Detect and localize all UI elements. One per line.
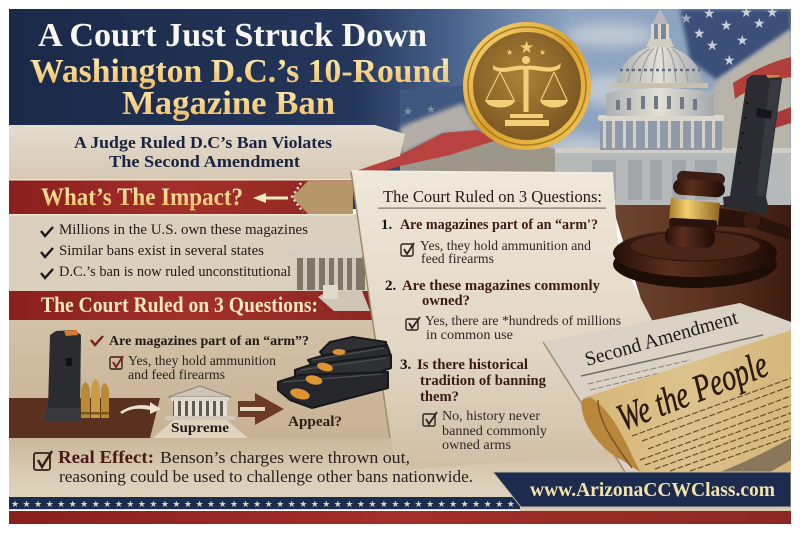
bottom red stripe	[9, 511, 791, 524]
sky and flag header background: ★	[736, 33, 749, 49]
subtitle	[74, 136, 332, 167]
sky and flag header background: ★	[426, 103, 436, 116]
bottom effect strip	[9, 438, 649, 510]
paper question 2: 2.	[385, 278, 396, 294]
tall magazine behind gavel	[723, 75, 782, 215]
gold scales medal: ★	[506, 48, 513, 57]
paper question 1	[381, 217, 598, 266]
main paper	[351, 171, 660, 470]
sky and flag header background: ★	[703, 6, 716, 22]
stars stripe	[9, 497, 520, 509]
paper heading: The Court Ruled on 3 Questions:	[383, 187, 602, 206]
bullets	[81, 379, 109, 418]
sky and flag header background: ★	[766, 5, 779, 21]
paper question 3: them?	[420, 389, 459, 405]
sky and flag header background: ★	[720, 18, 733, 34]
sky and flag header background: ★	[723, 53, 736, 69]
paper question 2: in common use	[426, 327, 513, 342]
gold scales medal: ★	[519, 38, 534, 58]
website banner	[493, 472, 791, 511]
paper question 2: Are these magazines commonly	[402, 278, 601, 294]
sky and flag header background: ★	[706, 38, 719, 54]
gold scales medal: ★	[539, 48, 546, 57]
beige hill behind supreme	[153, 418, 248, 438]
second amendment document	[543, 303, 791, 472]
red section band: impact	[9, 179, 353, 216]
subtitle: A Judge Ruled D.C’s Ban Violates	[74, 133, 332, 152]
paper question 3: owned arms	[442, 437, 511, 452]
wooden table	[615, 205, 791, 322]
red section band: court ruled: The Court Ruled on 3 Questions:	[41, 292, 318, 317]
main tan lower panel	[9, 320, 394, 440]
lower left tan panel	[9, 214, 371, 292]
real effect callout: Benson’s charges were thrown out,	[160, 448, 410, 467]
real effect callout: Real Effect:	[58, 447, 154, 467]
paper question 3: No, history never	[442, 408, 541, 423]
gold scales medal	[463, 22, 591, 150]
real effect callout	[34, 447, 473, 486]
main title: Washington D.C.’s 10-Round	[30, 53, 450, 90]
question one inside panel: Are magazines part of an “arm”?	[109, 334, 309, 349]
paper question 2	[385, 278, 621, 342]
heading: what's the impact: What’s The Impact?	[41, 184, 243, 211]
second amendment document: Second Amendment	[582, 307, 741, 371]
stars stripe: ★★★★★★★★★★★★★★★★★★★★★★★★★★★★★★★★★★★★★★★★★★★★★★	[11, 500, 541, 510]
main title	[30, 17, 450, 122]
question one inside panel: and feed firearms	[128, 367, 225, 382]
supreme court building: Supreme	[171, 421, 229, 436]
paper question 3: Is there historical	[417, 357, 528, 373]
left cream panel	[9, 125, 405, 182]
magazine illustration	[43, 330, 81, 421]
paper question 2: owned?	[422, 293, 470, 309]
arrow pointing left	[253, 193, 288, 203]
paper question 1: 1.	[381, 217, 392, 233]
sky and flag header background: ★	[403, 105, 413, 118]
arrow to appeal	[238, 393, 342, 430]
paper question 3: 3.	[400, 357, 412, 373]
arrow to appeal: Appeal?	[288, 414, 342, 430]
paper question 1: Yes, they hold ammunition and	[420, 238, 591, 253]
bullet list: impact: Millions in the U.S. own these magazines	[59, 222, 308, 238]
supreme court building	[165, 386, 235, 436]
sky and flag header background: ★	[753, 16, 766, 32]
real effect callout: reasoning could be used to challenge other bans nationwide.	[59, 467, 473, 486]
sky and flag header background: ★	[680, 11, 693, 27]
sky and flag header background: ★	[740, 5, 753, 21]
bullet list: impact: Similar bans exist in several states	[59, 243, 264, 259]
website banner: www.ArizonaCCWClass.com	[530, 479, 775, 501]
paper question 2: Yes, there are *hundreds of millions	[425, 313, 621, 328]
paper question 1: Are magazines part of an “arm'?	[400, 217, 598, 233]
bullet list: impact: D.C.’s ban is now ruled unconstitutional	[59, 264, 291, 280]
question one inside panel: Yes, they hold ammunition	[128, 353, 276, 368]
sky and flag header background: ★	[693, 26, 706, 42]
paper question 1: feed firearms	[421, 251, 494, 266]
main title: Magazine Ban	[122, 85, 335, 122]
rolled constitution parchment	[582, 330, 791, 472]
paper question 3	[400, 357, 547, 452]
question one inside panel	[91, 334, 309, 382]
bullet list: impact	[41, 222, 308, 280]
courthouse illustration	[297, 256, 370, 311]
paper question 3: tradition of banning	[420, 373, 547, 389]
subtitle: The Second Amendment	[109, 152, 300, 171]
gavel	[613, 170, 791, 288]
main title: A Court Just Struck Down	[38, 17, 427, 54]
sky and flag header background	[9, 5, 791, 209]
stack of magazines	[278, 337, 391, 408]
curved arrow to supreme court	[120, 402, 161, 414]
wood shelf under magazine	[9, 398, 160, 438]
paper question 3: banned commonly	[442, 423, 547, 438]
capitol building	[555, 9, 791, 208]
